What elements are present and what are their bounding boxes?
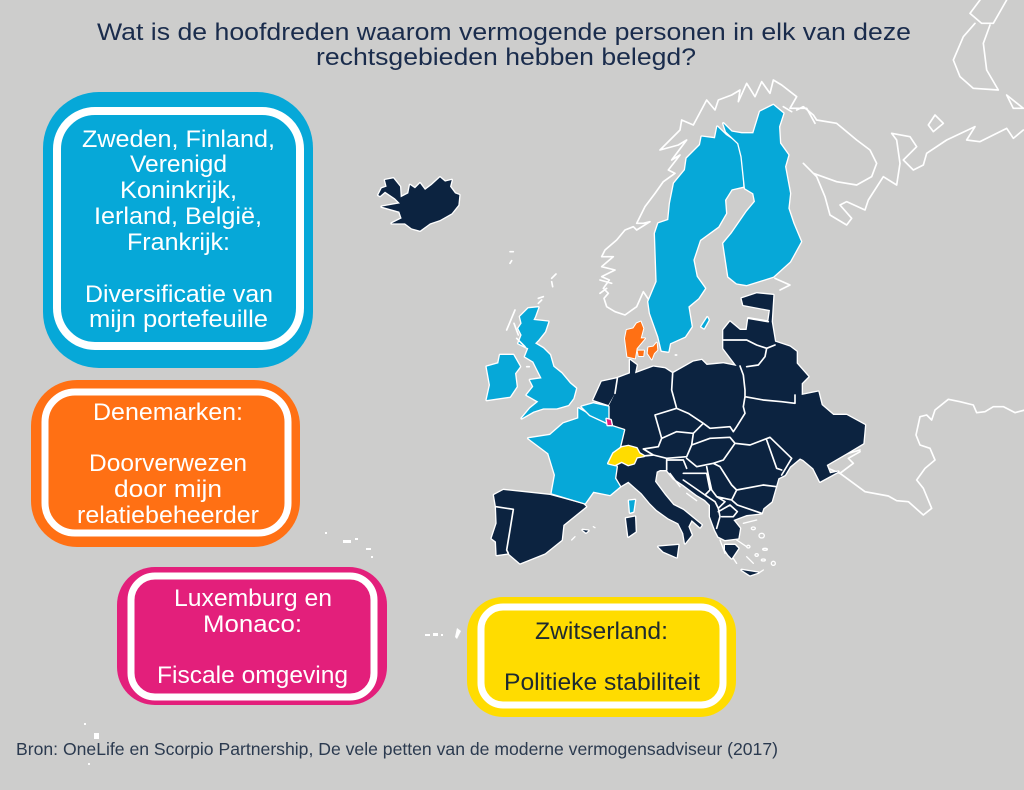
panel: diversificatie: mijn portefeuille — [89, 306, 268, 333]
panel: doorverwezen: door mijn — [114, 476, 222, 503]
panel: diversificatie: Frankrijk: — [127, 229, 230, 256]
panel: doorverwezen: Doorverwezen — [89, 450, 247, 477]
map: Norway outline — [600, 80, 815, 315]
map: continental Europe — [492, 293, 865, 575]
map: Nordic countries — [600, 80, 815, 352]
map: Russia outlines — [775, 0, 1023, 290]
map: mainland dark countries — [593, 293, 865, 543]
map: country borders — [496, 318, 795, 553]
panel: fiscale omgeving: Fiscale omgeving — [157, 662, 348, 689]
panel: diversificatie — [43, 92, 313, 368]
map: Corsica — [629, 500, 635, 513]
map: Sardinia — [626, 517, 636, 537]
panel: diversificatie: Diversificatie van — [85, 281, 273, 308]
map: Sicily — [658, 545, 678, 557]
map: distant islands — [84, 532, 461, 765]
map: Ireland — [487, 355, 520, 400]
map: Belgium — [582, 403, 612, 425]
panel: diversificatie: Zweden, Finland, — [82, 126, 275, 153]
map: United Kingdom — [518, 307, 576, 418]
panel: politieke stabiliteit: Politieke stabiliteit — [504, 669, 700, 696]
map: Denmark — [625, 322, 657, 359]
title — [97, 19, 911, 71]
panel: diversificatie: Koninkrijk, — [120, 177, 237, 204]
map: Mallorca — [583, 530, 588, 533]
panel: politieke stabiliteit — [467, 597, 736, 717]
panel: fiscale omgeving — [117, 567, 387, 705]
map: small northern islands — [507, 252, 677, 367]
map: Luxembourg — [607, 419, 612, 425]
map: Iceland, UK, Ireland, Denmark — [378, 177, 677, 418]
panel: diversificatie: Verenigd — [130, 151, 227, 178]
title: Wat is de hoofdreden waarom vermogende personen in elk van deze — [97, 19, 911, 46]
panel: doorverwezen: Denemarken: — [93, 399, 243, 426]
panel: fiscale omgeving: Luxemburg en — [174, 585, 332, 612]
source note: Bron: OneLife en Scorpio Partnership, De vele petten van de moderne vermogensadviseur (2017) — [16, 739, 778, 759]
title: rechtsgebieden hebben belegd? — [316, 44, 696, 71]
panel: doorverwezen — [31, 380, 300, 547]
map: Finland — [723, 105, 801, 285]
map: Iberian peninsula — [492, 490, 586, 563]
map: Iceland — [378, 177, 459, 231]
panel: doorverwezen: relatiebeheerder — [77, 502, 259, 529]
map: Sweden — [648, 127, 743, 352]
map: Switzerland — [608, 446, 644, 465]
map: France — [528, 408, 624, 503]
panel: politieke stabiliteit: Zwitserland: — [535, 618, 668, 645]
panel: fiscale omgeving: Monaco: — [203, 611, 302, 638]
map: Crete — [742, 570, 758, 575]
panel: diversificatie: Ierland, België, — [94, 203, 262, 230]
map: Gotland — [701, 317, 709, 328]
map: Adriatic and Aegean islands — [572, 473, 763, 573]
map: Peloponnese — [725, 545, 738, 558]
